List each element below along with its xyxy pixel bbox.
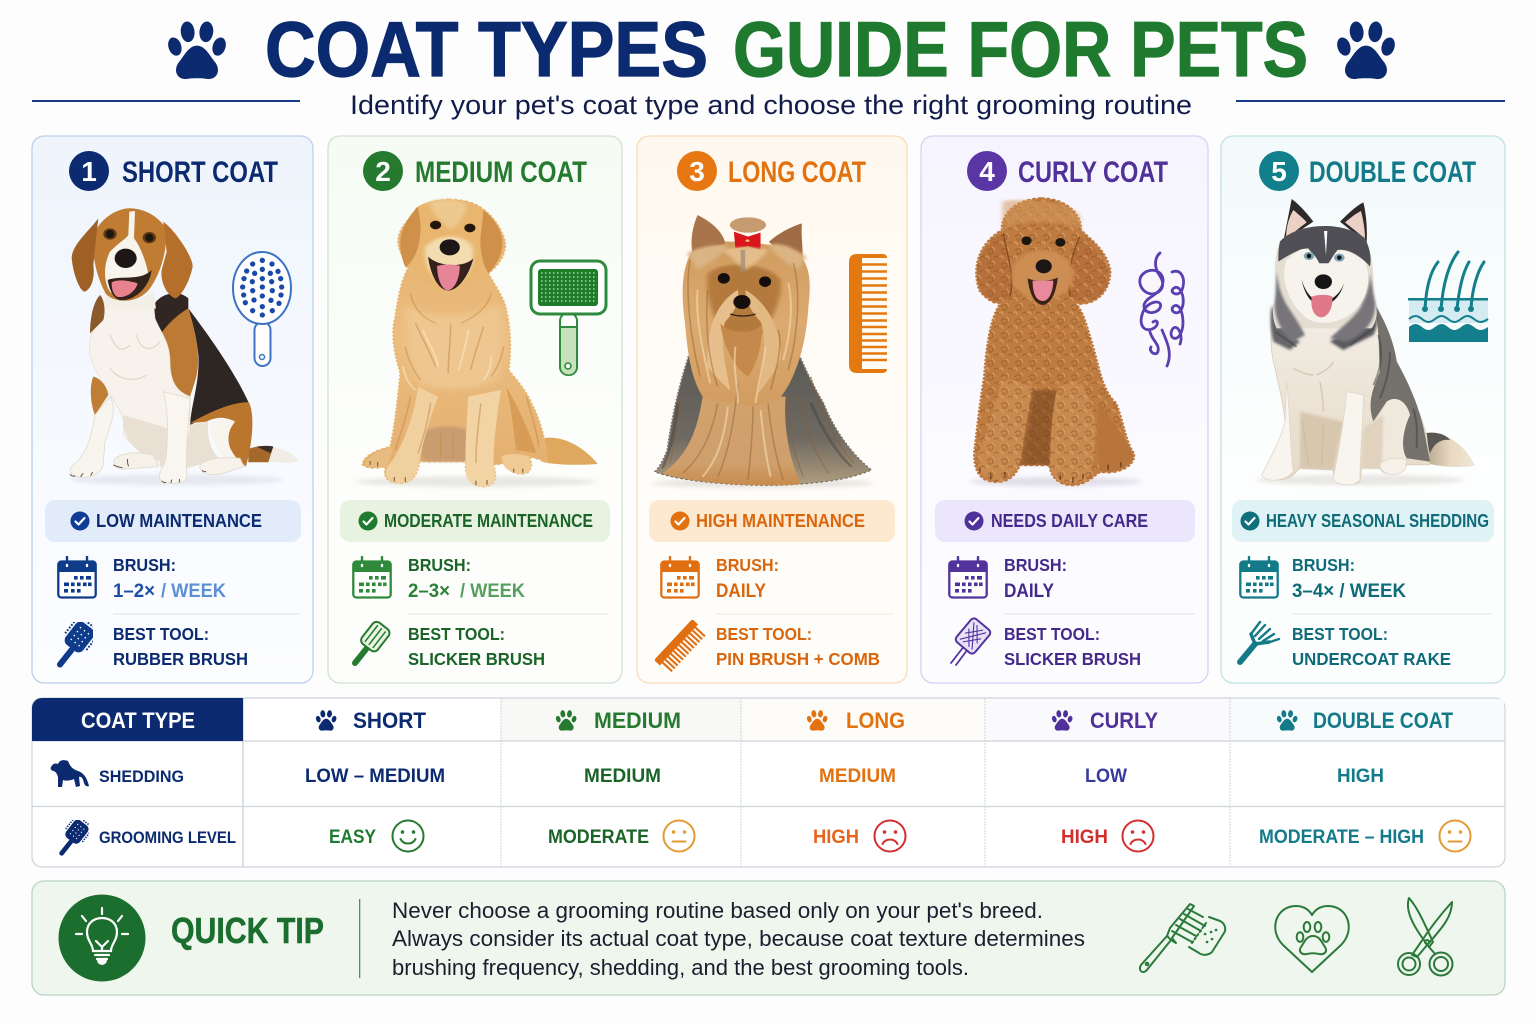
panel: medium coat	[328, 136, 622, 683]
brushing frequency: / WEEK	[460, 581, 525, 602]
row: shedding: SHEDDING	[99, 768, 184, 786]
icon: left paw	[166, 21, 228, 79]
heading: long coat	[677, 151, 866, 191]
best tool: SLICKER BRUSH	[1004, 649, 1141, 669]
heading: medium coat: MEDIUM COAT	[415, 156, 587, 189]
brushing frequency: BRUSH:	[1004, 555, 1067, 575]
header: coat type	[32, 698, 243, 741]
badge: low maintenance: LOW MAINTENANCE	[96, 511, 262, 531]
brushing frequency: BRUSH:	[113, 555, 176, 575]
brushing frequency: BRUSH:	[1292, 555, 1355, 575]
subtitle: Identify your pet's coat type and choose the right grooming routine	[350, 90, 1192, 120]
badge: heavy seasonal shedding: HEAVY SEASONAL SHEDDING	[1266, 511, 1489, 531]
best tool: SLICKER BRUSH	[408, 649, 545, 669]
best tool: BEST TOOL:	[1292, 624, 1388, 644]
icon: heart with paw	[1275, 906, 1349, 972]
row: shedding: HIGH	[1337, 766, 1384, 787]
row: shedding: LOW	[1085, 766, 1127, 787]
heading: long coat: 3	[689, 156, 705, 187]
icon: rubber brush	[233, 252, 291, 366]
row: shedding: MEDIUM	[584, 766, 661, 787]
icon: scissors	[1398, 898, 1452, 976]
row: grooming level: MODERATE – HIGH	[1259, 827, 1424, 848]
tip text	[392, 898, 1085, 980]
heading: short coat: 1	[81, 156, 97, 187]
panel: short coat	[32, 136, 313, 683]
header: long	[806, 708, 905, 733]
badge: heavy seasonal shedding	[1232, 500, 1494, 542]
heading: double coat: 5	[1271, 156, 1287, 187]
header: short: SHORT	[353, 708, 427, 733]
tip text: Always consider its actual coat type, because coat texture determines	[392, 926, 1085, 951]
best tool	[1240, 622, 1451, 669]
header: curly	[1051, 708, 1158, 733]
heading: medium coat: 2	[375, 156, 391, 187]
heading: short coat: SHORT COAT	[122, 156, 278, 189]
header: double coat: DOUBLE COAT	[1313, 708, 1453, 733]
badge: moderate maintenance	[340, 500, 610, 542]
row: grooming level: GROOMING LEVEL	[99, 829, 236, 847]
panel: long coat	[637, 136, 907, 683]
row: grooming level: HIGH	[1061, 827, 1108, 848]
tip text: brushing frequency, shedding, and the best grooming tools.	[392, 955, 969, 980]
header: long: LONG	[846, 708, 905, 733]
brushing frequency: 1–2×	[113, 581, 155, 602]
brushing frequency	[58, 555, 226, 602]
brushing frequency: 3–4× / WEEK	[1292, 581, 1406, 602]
icon: right paw	[1335, 21, 1397, 79]
illustration: beagle	[70, 208, 299, 485]
best tool	[355, 620, 545, 669]
brushing frequency: DAILY	[1004, 581, 1054, 602]
header: coat type: COAT TYPE	[81, 708, 195, 733]
icon: brush and comb	[1140, 904, 1225, 972]
row: shedding	[51, 760, 1384, 787]
illustration: yorkshire terrier	[652, 215, 874, 488]
heading: long coat: LONG COAT	[728, 156, 866, 189]
row: shedding: LOW – MEDIUM	[305, 766, 445, 787]
row: shedding: MEDIUM	[819, 766, 896, 787]
icon: curl strands	[1140, 253, 1184, 366]
row: grooming level: EASY	[329, 827, 376, 848]
header: curly: CURLY	[1090, 708, 1158, 733]
best tool: BEST TOOL:	[408, 624, 505, 644]
panel: quick tip	[32, 881, 1505, 995]
heading: short coat	[69, 151, 278, 191]
row: grooming level: MODERATE	[548, 827, 649, 848]
best tool: BEST TOOL:	[716, 624, 812, 644]
icon: comb	[849, 254, 887, 373]
badge: high maintenance: HIGH MAINTENANCE	[696, 511, 865, 531]
heading: quick tip: QUICK TIP	[171, 910, 324, 951]
header: medium: MEDIUM	[594, 708, 681, 733]
best tool	[654, 619, 880, 674]
brushing frequency: BRUSH:	[716, 555, 779, 575]
best tool: PIN BRUSH + COMB	[716, 649, 880, 669]
icon: dog silhouette	[51, 760, 89, 787]
icon: light bulb	[58, 894, 146, 982]
row: grooming level: HIGH	[813, 827, 859, 848]
heading: medium coat	[363, 151, 587, 191]
best tool: RUBBER BRUSH	[113, 649, 248, 669]
brushing frequency: 2–3×	[408, 581, 450, 602]
brushing frequency	[949, 555, 1067, 602]
icon: undercoat layers	[1408, 252, 1488, 342]
heading: curly coat: CURLY COAT	[1018, 156, 1168, 189]
panel: curly coat	[921, 136, 1208, 683]
heading: curly coat	[967, 151, 1168, 191]
heading: double coat	[1259, 151, 1476, 191]
brushing frequency	[353, 555, 525, 602]
badge: needs daily care	[935, 500, 1195, 542]
title text: GUIDE FOR PETS	[733, 5, 1308, 93]
best tool: BEST TOOL:	[113, 624, 209, 644]
illustration: poodle	[970, 198, 1141, 486]
best tool: BEST TOOL:	[1004, 624, 1100, 644]
illustration: husky	[1257, 199, 1475, 485]
badge: low maintenance	[45, 500, 301, 542]
comparison table	[32, 698, 1505, 867]
brushing frequency	[1240, 555, 1406, 602]
heading: double coat: DOUBLE COAT	[1309, 156, 1476, 189]
tip text: Never choose a grooming routine based only on your pet's breed.	[392, 898, 1043, 923]
brushing frequency	[661, 555, 779, 602]
icon: slicker brush	[531, 261, 606, 375]
brushing frequency: DAILY	[716, 581, 766, 602]
best tool	[951, 617, 1141, 669]
badge: high maintenance	[649, 500, 895, 542]
title	[166, 5, 1397, 93]
brushing frequency: / WEEK	[161, 581, 226, 602]
badge: moderate maintenance: MODERATE MAINTENANCE	[384, 511, 593, 531]
best tool: UNDERCOAT RAKE	[1292, 649, 1451, 669]
best tool	[60, 616, 248, 669]
heading: curly coat: 4	[979, 156, 995, 187]
badge: needs daily care: NEEDS DAILY CARE	[991, 511, 1148, 531]
illustration: golden retriever	[355, 199, 598, 487]
header: medium	[555, 708, 681, 733]
brushing frequency: BRUSH:	[408, 555, 471, 575]
row: grooming level	[62, 815, 1470, 853]
panel: double coat	[1221, 136, 1505, 683]
header: short	[315, 708, 427, 733]
title text: COAT TYPES	[265, 5, 708, 93]
